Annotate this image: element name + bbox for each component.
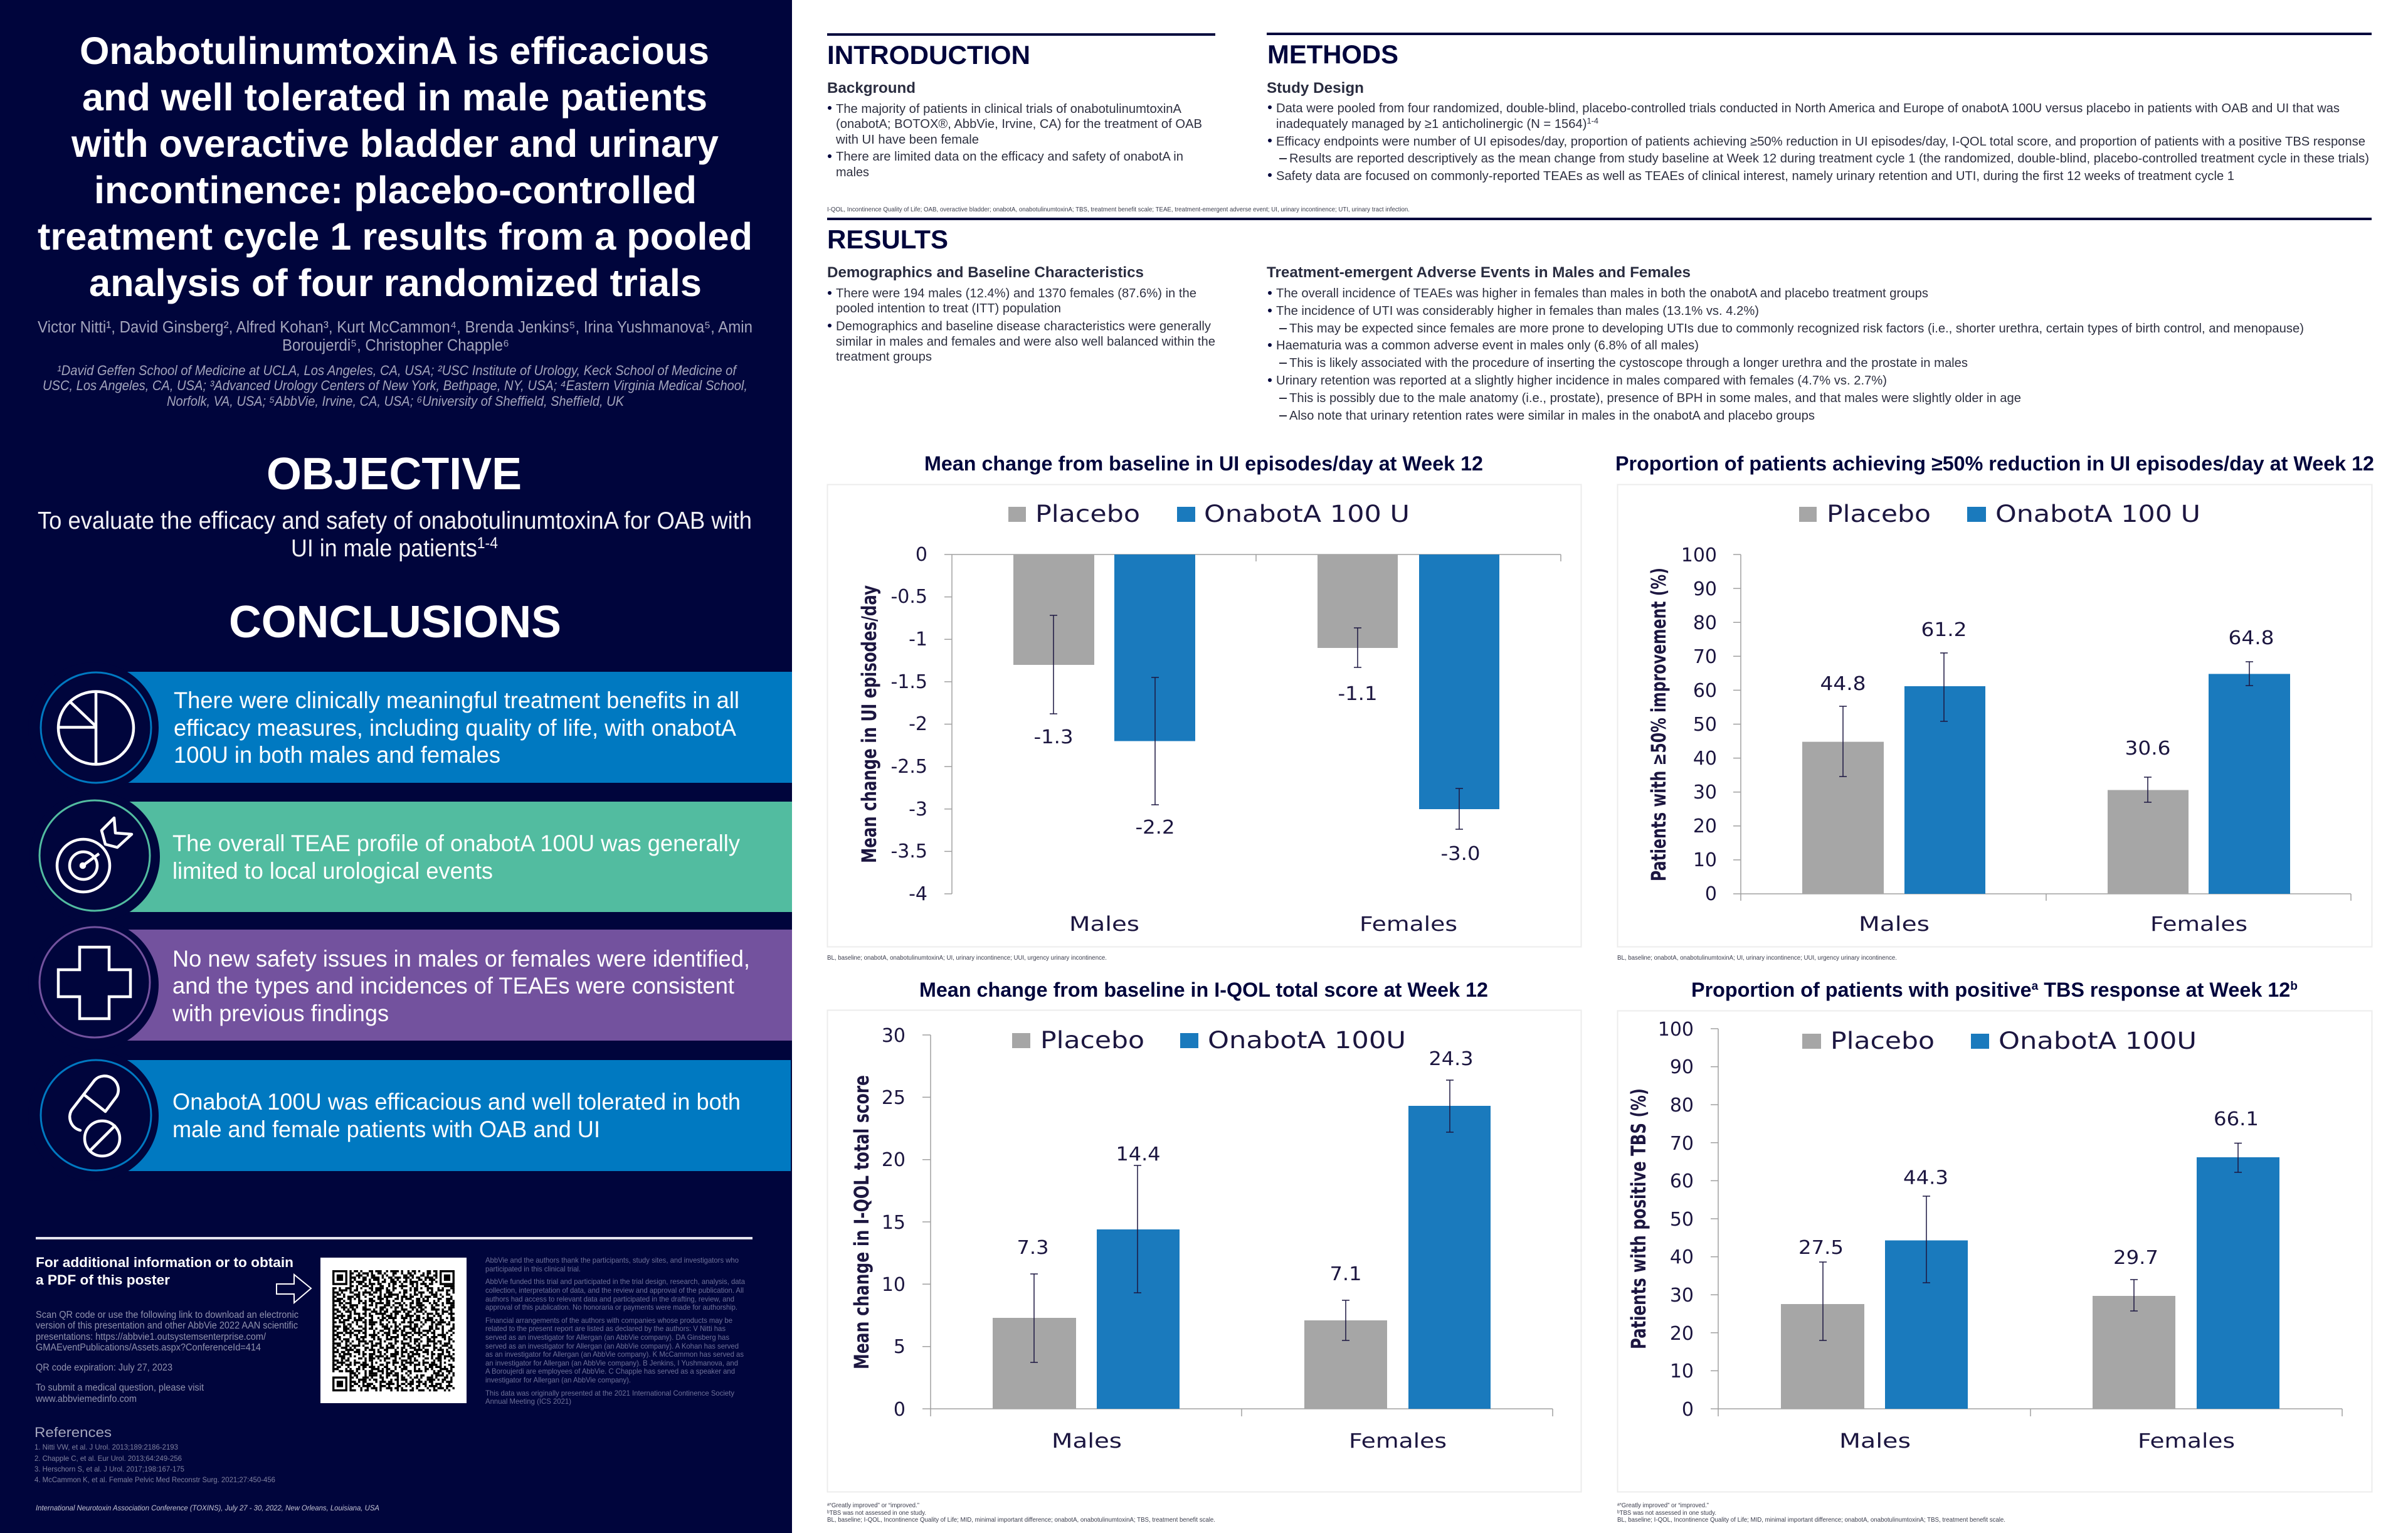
affiliations [43,363,747,409]
methods section [1267,33,2372,183]
conference line: International Neurotoxin Association Conference (TOXINS), July 27 - 30, 2022, New Orleans, Louisiana, USA [36,1504,379,1512]
acknowledgements and disclosures: as an investigator for Allergan (an AbbVie company). K McCammon has served as [485,1350,744,1359]
adverse events bullets: Also note that urinary retention rates were similar in males in the onabotA and placebo groups [1289,408,1815,423]
error bars [1050,615,1463,829]
background bullets: There are limited data on the efficacy and safety of onabotA in [836,149,1183,164]
y-axis tick labels: -1.5 [890,671,927,693]
bars [993,1106,1491,1409]
conclusion banner 2 [29,792,792,922]
chart title: Mean change from baseline in UI episodes/day at Week 12 [924,452,1483,475]
adverse events bullets: This is possibly due to the male anatomy (i.e., prostate), presence of BPH in some males, and that males were slightly older in age [1289,391,2021,405]
objective heading: OBJECTIVE [267,449,522,499]
value labels: 24.3 [1428,1048,1474,1070]
chart footnotes [827,1502,1215,1524]
category labels: Males [1069,912,1139,936]
y-axis tick labels: 15 [882,1212,906,1234]
banner 2 text: The overall TEAE profile of onabotA 100U was generally [172,830,740,856]
y-axis tick labels: 5 [894,1336,906,1358]
legend [1008,501,1410,528]
results heading: RESULTS [827,225,948,254]
y-axis tick labels: 90 [1693,578,1717,600]
acknowledgements and disclosures: an investigator for Allergan (an AbbVie company). B Jenkins, I Yushmanova, and [485,1359,738,1367]
category labels [1859,912,2247,936]
category labels [1052,1429,1447,1453]
category labels: Females [1360,912,1457,936]
chart title: Mean change from baseline in I-QOL total score at Week 12 [919,979,1488,1001]
results section [827,218,2372,423]
category labels: Females [1349,1429,1447,1453]
category labels: Males [1839,1429,1911,1453]
banner 1 text: There were clinically meaningful treatment benefits in all [174,687,739,713]
study design bullets: Results are reported descriptively as the mean change from study baseline at Week 12 during treatment cycle 1 (the randomized, double-blind, placebo-controlled treatment cycle in these trials) [1289,151,2369,166]
y-axis tick labels: -4 [909,883,927,905]
acknowledgements and disclosures: AbbVie funded this trial and participated in the trial design, research, analysis, data [485,1277,745,1286]
legend: OnabotA 100U [1208,1027,1406,1054]
value labels: 61.2 [1921,619,1967,641]
y-axis tick labels: 10 [1670,1361,1694,1382]
study design bullets [1268,101,2369,183]
value labels: 27.5 [1798,1237,1844,1259]
acknowledgements and disclosures: collection, interpretation of data, and the review and approval of the publication. All [485,1286,744,1295]
background bullets: with UI have been female [835,132,979,147]
banner 1 text [174,687,739,768]
bars [1802,674,2290,894]
y-axis title: Mean change in UI episodes/day [857,585,881,863]
y-axis tick labels: 20 [882,1149,906,1171]
poster title: OnabotulinumtoxinA is efficacious [80,29,709,72]
authors: Boroujerdi⁵, Christopher Chapple⁶ [282,337,509,354]
references: 2. Chapple C, et al. Eur Urol. 2013;64:249-256 [34,1454,182,1463]
y-axis tick labels: 70 [1693,646,1717,668]
value labels: -2.2 [1135,817,1175,839]
y-axis tick labels: 10 [1693,849,1717,871]
banner 1 text: efficacy measures, including quality of life, with onabotA [174,714,736,741]
background subheading: Background [827,80,916,97]
background bullets [828,102,1202,179]
study design subheading: Study Design [1267,80,1364,97]
acknowledgements and disclosures: approval of this publication. No honoraria or payments were made for authorship. [485,1303,737,1312]
icon: capsule and no-symbol [70,1076,120,1156]
introduction heading: INTRODUCTION [827,40,1030,70]
value labels: 64.8 [2229,627,2274,649]
y-axis tick labels: 20 [1670,1323,1694,1345]
y-axis tick labels: 60 [1670,1170,1694,1192]
introduction section [827,33,1215,179]
legend: Placebo [1827,501,1931,528]
y-axis tick labels: 100 [1681,544,1717,566]
banner 3 text: and the types and incidences of TEAEs were consistent [172,972,735,999]
demographics bullets: pooled intention to treat (ITT) population [836,301,1061,316]
chart footnote: BL, baseline; onabotA, onabotulinumtoxinA; UI, urinary incontinence; UUI, urgency urinary incontinence. [1617,955,1897,962]
value labels: 30.6 [2125,738,2171,760]
adverse events bullets: The overall incidence of TEAEs was higher in females than males in both the onabotA and placebo treatment groups [1276,286,1928,300]
y-axis tick labels: 60 [1693,680,1717,702]
legend [1799,501,2200,528]
acknowledgements and disclosures: AbbVie and the authors thank the participants, study sites, and investigators who [485,1256,739,1265]
references: 3. Herschorn S, et al. J Urol. 2017;198:167-175 [34,1465,184,1473]
chart footnotes: ᵃ“Greatly improved” or “improved.” [1617,1502,1709,1509]
acknowledgements and disclosures [485,1256,745,1406]
y-axis tick labels: 50 [1670,1209,1694,1231]
objective text: To evaluate the efficacy and safety of onabotulinumtoxinA for OAB with [38,507,752,534]
poster title: treatment cycle 1 results from a pooled [38,215,752,258]
arrow to QR code [277,1275,311,1303]
y-axis tick labels: -2 [909,713,927,735]
error bars [1819,1143,2242,1340]
references: 1. Nitti VW, et al. J Urol. 2013;189:2186-2193 [34,1443,178,1451]
poster title [38,29,752,304]
acknowledgements and disclosures: investigator for Allergan (an AbbVie company). [485,1376,631,1384]
conclusion banner 4 [28,1051,791,1181]
y-axis tick labels: -0.5 [890,586,927,608]
chart title: Proportion of patients achieving ≥50% reduction in UI episodes/day at Week 12 [1615,452,2374,475]
chart title: a [2032,980,2039,993]
chart footnotes: BL, baseline; I-QOL, Incontinence Quality of Life; MID, minimal important difference; onabotA, onabotulinumtoxinA; TBS, treatment benefit scale. [1617,1517,2005,1524]
value labels [1798,1108,2259,1269]
y-axis tick labels: 0 [1682,1399,1694,1421]
value labels: 7.1 [1329,1263,1362,1285]
y-axis tick labels: 50 [1693,714,1717,736]
y-axis tick labels [890,544,927,905]
category labels: Females [2138,1429,2235,1453]
download instructions: Scan QR code or use the following link to download an electronic [36,1310,298,1320]
objective text [38,507,752,562]
category labels [1069,912,1457,936]
chart footnote: BL, baseline; onabotA, onabotulinumtoxinA; UI, urinary incontinence; UUI, urgency urinary incontinence. [827,955,1107,962]
axes [922,1035,1553,1416]
study design bullets: Efficacy endpoints were number of UI episodes/day, proportion of patients achieving ≥50% reduction in UI episodes/day, I-QOL total score, and proportion of patients with a positive TBS response [1276,134,2365,149]
download instructions [35,1310,298,1404]
chart footnotes: ᵇTBS was not assessed in one study. [827,1510,926,1517]
legend: OnabotA 100 U [1204,501,1410,528]
references: 4. McCammon K, et al. Female Pelvic Med Reconstr Surg. 2021;27:450-456 [34,1475,275,1484]
demographics subheading: Demographics and Baseline Characteristics [827,264,1144,281]
y-axis tick labels [882,1025,906,1421]
chart title: Proportion of patients with positive [1691,979,2028,1001]
banner 2 text [172,830,740,884]
download instructions: QR code expiration: July 27, 2023 [36,1362,172,1373]
download instructions: To submit a medical question, please visit [36,1382,204,1393]
background bullets: The majority of patients in clinical trials of onabotulinumtoxinA [836,102,1181,116]
additional information heading [36,1255,293,1288]
y-axis tick labels: 30 [1670,1285,1694,1307]
objective text: UI in male patients [291,535,494,562]
chart footnotes [1617,1502,2005,1524]
chart: proportion with positive TBS response [1617,979,2372,1524]
adverse events bullets [1268,286,2304,423]
value labels: -1.1 [1338,683,1377,705]
adverse events subheading: Treatment-emergent Adverse Events in Males and Females [1267,264,1691,281]
legend: Placebo [1040,1027,1144,1054]
demographics bullets: treatment groups [836,349,932,364]
objective text: 1-4 [477,534,498,552]
y-axis tick labels: 25 [882,1087,906,1109]
value labels: 14.4 [1116,1143,1160,1165]
value labels: 29.7 [2113,1247,2158,1269]
error bars [1839,653,2253,802]
category labels: Females [2150,912,2247,936]
banner 1 text: 100U in both males and females [174,741,500,768]
axes [1711,1029,2342,1416]
y-axis tick labels: 80 [1693,612,1717,634]
banner 4 text: male and female patients with OAB and UI [172,1116,600,1142]
y-axis tick labels: 10 [882,1274,906,1296]
y-axis tick labels: 30 [1693,782,1717,804]
acknowledgements and disclosures: Financial arrangements of the authors with companies whose products may be [485,1316,732,1325]
legend: OnabotA 100U [1999,1027,2197,1054]
value labels: -3.0 [1441,843,1480,865]
y-axis title: Mean change in I-QOL total score [850,1075,874,1369]
banner 3 text: with previous findings [172,1000,389,1026]
download instructions: GMAEventPublications/Assets.aspx?ConferenceId=414 [36,1342,261,1353]
banner 3 text [172,945,750,1026]
legend: OnabotA 100 U [1995,501,2200,528]
additional information heading: a PDF of this poster [36,1272,170,1288]
axes [944,554,1561,894]
acknowledgements and disclosures: Annual Meeting (ICS 2021) [485,1397,571,1406]
footer divider [36,1237,752,1239]
acknowledgements and disclosures: served as an investigator for Allergan (an AbbVie company). DA Ginsberg has [485,1333,729,1342]
additional information heading: For additional information or to obtain [36,1255,293,1270]
value labels [1033,683,1480,865]
chart: proportion achieving at least 50% reduction [1615,452,2374,962]
legend: Placebo [1035,501,1140,528]
icon: target with arrow [57,818,132,892]
y-axis tick labels: 100 [1658,1019,1694,1041]
study design bullets: inadequately managed by ≥1 anticholinergic (N = 1564) [1276,117,1592,131]
y-axis title: Patients with positive TBS (%) [1627,1088,1650,1349]
adverse events bullets: Urinary retention was reported at a slightly higher incidence in males compared with females (4.7% vs. 2.7%) [1276,373,1887,388]
demographics bullets [828,286,1215,364]
conclusions heading: CONCLUSIONS [229,597,561,647]
download instructions: version of this presentation and other AbbVie 2022 AAN scientific [36,1320,298,1331]
y-axis tick labels [1658,1019,1694,1421]
study design bullets: Safety data are focused on commonly-reported TEAEs as well as TEAEs of clinical interest, namely urinary retention and UTI, during the first 12 weeks of treatment cycle 1 [1276,169,2234,183]
left sidebar panel [0,0,792,1533]
y-axis tick labels: 20 [1693,815,1717,837]
y-axis tick labels: -3.5 [890,841,927,862]
category labels [1839,1429,2235,1453]
acknowledgements and disclosures: authors had access to relevant data and participated in the drafting, review, and [485,1295,734,1303]
QR code [320,1258,467,1403]
icon: pie chart [58,691,134,764]
bars [1781,1157,2279,1409]
chart: mean change in UI episodes/day [827,452,1582,962]
legend [1012,1027,1406,1054]
banner 3 text: No new safety issues in males or females were identified, [172,945,750,972]
value labels: -1.3 [1033,726,1074,748]
chart footnotes: ᵇTBS was not assessed in one study. [1617,1510,1716,1517]
y-axis tick labels [1681,544,1717,905]
y-axis tick labels: -3 [909,798,927,820]
adverse events bullets: The incidence of UTI was considerably higher in females than males (13.1% vs. 4.2%) [1276,304,1759,318]
poster title: and well tolerated in male patients [82,76,707,119]
y-axis tick labels: 80 [1670,1095,1694,1117]
authors [38,319,752,354]
value labels [1017,1048,1474,1285]
poster title: analysis of four randomized trials [89,262,702,304]
download instructions: presentations: https://abbvie1.outsystemsenterprise.com/ [36,1332,267,1342]
y-axis tick labels: -1 [909,629,927,650]
acknowledgements and disclosures: related to the present report are listed as declared by the authors: V Nitti has [485,1324,726,1333]
background bullets: (onabotA; BOTOX®, AbbVie, Irvine, CA) for the treatment of OAB [836,117,1202,131]
affiliations: ¹David Geffen School of Medicine at UCLA, Los Angeles, CA, USA; ²USC Institute of Urology, Keck School of Medicine of [57,363,738,378]
acknowledgements and disclosures: participated in this clinical trial. [485,1265,581,1273]
poster title: with overactive bladder and urinary [71,122,719,165]
value labels: 44.3 [1903,1167,1948,1189]
legend: Placebo [1830,1027,1935,1054]
error bars [1030,1080,1454,1362]
study design bullets: Data were pooled from four randomized, double-blind, placebo-controlled trials conducted in North America and Europe of onabotA 100U versus placebo in patients with OAB and UI that was [1276,101,2340,115]
acknowledgements and disclosures: This data was originally presented at the 2021 International Continence Society [485,1389,734,1398]
y-axis tick labels: 90 [1670,1056,1694,1078]
banner 2 text: limited to local urological events [172,857,493,884]
chart title: b [2290,980,2298,993]
value labels: 66.1 [2214,1108,2259,1130]
icon: medical cross [58,947,130,1019]
category labels: Males [1052,1429,1122,1453]
y-axis tick labels: 40 [1670,1246,1694,1268]
y-axis title: Patients with ≥50% improvement (%) [1647,568,1671,881]
download instructions: www.abbviemedinfo.com [35,1394,137,1404]
demographics bullets: There were 194 males (12.4%) and 1370 females (87.6%) in the [836,286,1196,300]
bars [1013,554,1499,809]
chart: mean change in I-QOL total score [827,979,1582,1524]
banner 4 text [172,1088,741,1142]
y-axis tick labels: 40 [1693,748,1717,770]
chart title: TBS response at Week 12 [2038,979,2290,1001]
legend [1802,1027,2197,1054]
category labels: Males [1859,912,1930,936]
y-axis tick labels: -2.5 [890,756,927,778]
acknowledgements and disclosures: served as an investigator for Allergan (an AbbVie company). A Kohan has served [485,1342,739,1350]
value labels: 44.8 [1820,673,1866,695]
axes [1733,554,2351,901]
adverse events bullets: This may be expected since females are more prone to developing UTIs due to commonly recognized risk factors (i.e., shorter urethra, certain types of birth control, and menopause) [1289,321,2304,336]
background bullets: males [836,165,869,179]
chart footnotes: BL, baseline; I-QOL, Incontinence Quality of Life; MID, minimal important difference; onabotA, onabotulinumtoxinA; TBS, treatment benefit scale. [827,1517,1215,1524]
y-axis tick labels: 0 [916,544,927,566]
chart footnotes: ᵃ“Greatly improved” or “improved.” [827,1502,920,1509]
affiliations: USC, Los Angeles, CA, USA; ³Advanced Urology Centers of New York, Bethpage, NY, USA; ⁴Eastern Virginia Medical School, [43,378,747,393]
conclusion banner 3 [28,920,792,1050]
value labels: 7.3 [1017,1237,1048,1259]
study design bullets: 1-4 [1587,116,1598,125]
adverse events bullets: This is likely associated with the procedure of inserting the cystoscope through a longer urethra and the prostate in males [1289,356,1968,370]
y-axis tick labels: 0 [894,1399,906,1421]
demographics bullets: similar in males and females and were also well balanced within the [836,334,1215,349]
demographics bullets: Demographics and baseline disease characteristics were generally [836,319,1212,334]
y-axis tick labels: 70 [1670,1133,1694,1155]
methods heading: METHODS [1267,40,1398,69]
adverse events bullets: Haematuria was a common adverse event in males only (6.8% of all males) [1276,338,1699,353]
abbreviations footnote: I-QOL, Incontinence Quality of Life; OAB, overactive bladder; onabotA, onabotulinumtoxinA; TBS, treatment benefit scale; TEAE, treatment-emergent adverse event; UI, urinary incontinence; UTI, urinary tract infection. [827,206,1410,213]
conclusion banner 1 [28,662,792,793]
affiliations: Norfolk, VA, USA; ⁵AbbVie, Irvine, CA, USA; ⁶University of Sheffield, Sheffield, UK [167,393,625,409]
y-axis tick labels: 0 [1705,883,1717,905]
poster title: incontinence: placebo-controlled [94,169,697,211]
references [34,1424,275,1484]
acknowledgements and disclosures: A Boroujerdi are employees of AbbVie. C Chapple has served as a speaker and [485,1367,735,1376]
references: References [34,1424,112,1440]
value labels [1820,619,2274,760]
authors: Victor Nitti¹, David Ginsberg², Alfred Kohan³, Kurt McCammon⁴, Brenda Jenkins⁵, Irina Yushmanova⁵, Amin [38,319,752,336]
banner 4 text: OnabotA 100U was efficacious and well tolerated in both [172,1088,741,1115]
y-axis tick labels: 30 [882,1025,906,1047]
